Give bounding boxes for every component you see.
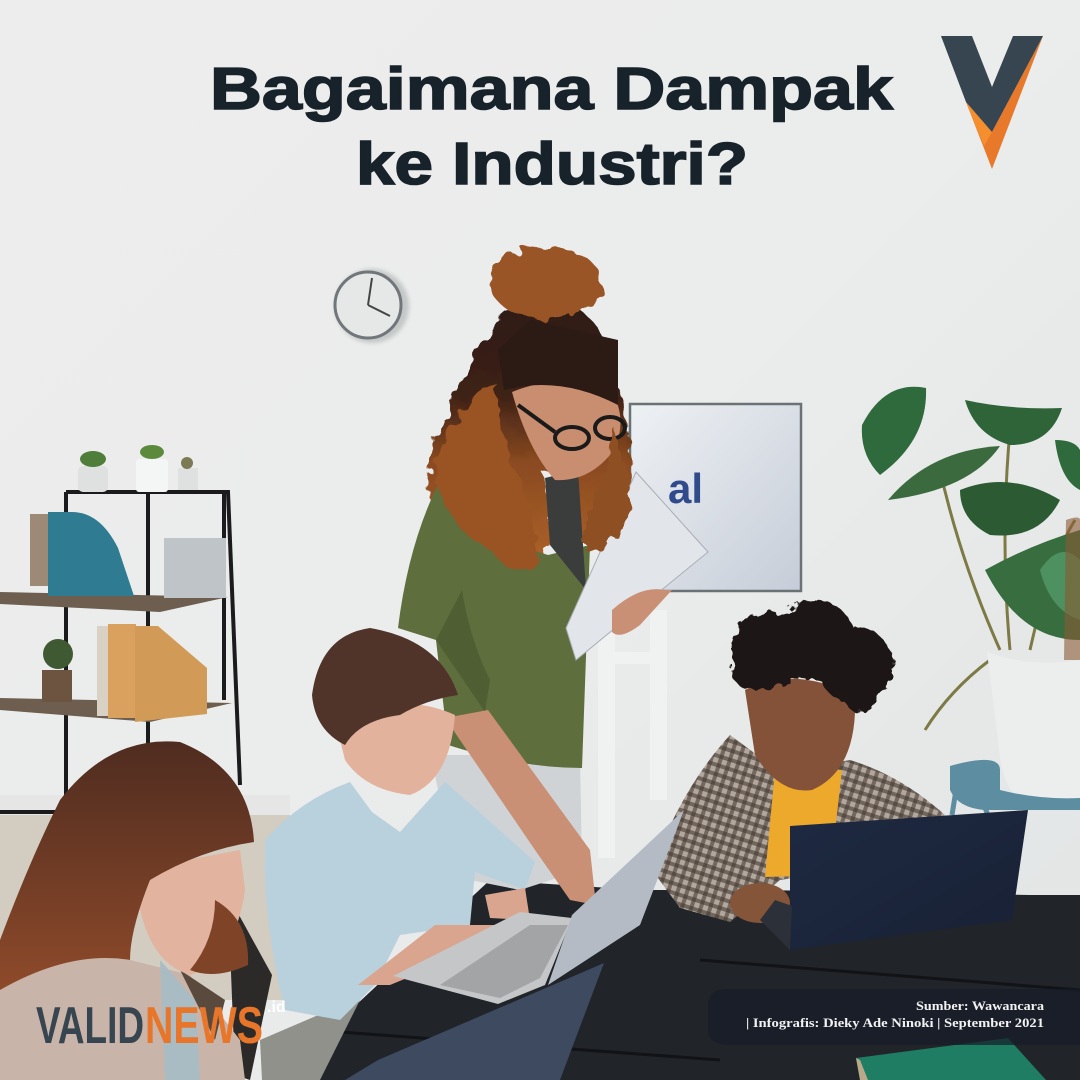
boy face [745,679,855,791]
teacher blouse [398,462,590,768]
source caption [708,989,1080,1045]
logo: Validnews: NEWS [145,997,263,1055]
source caption: Sumber: Wawancara [916,999,1045,1013]
floor [0,815,290,1000]
teacher hair back [428,298,632,572]
right laptop [760,810,1028,950]
girl hair [0,741,254,990]
table [290,880,1080,1080]
green book [856,1038,1046,1080]
boy hand [358,925,540,985]
chair [228,895,272,1080]
girl face [135,850,245,975]
title: Bagaimana Dampak [210,56,893,122]
girl blouse [0,958,245,1080]
teacher [398,247,708,905]
wall monitor [598,404,801,858]
title [210,56,893,197]
boy hand [730,883,790,923]
center boy [260,628,540,1080]
teacher face [512,382,621,480]
boy hair [312,628,458,745]
source caption: | Infografis: Dieky Ade Ninoki | September 2021 [746,1016,1044,1030]
teacher hair bun [490,247,602,319]
shelf [0,445,240,812]
teacher arm [445,710,596,905]
boy shirt [652,735,945,922]
teacher glasses [518,405,625,449]
potted plant [862,387,1080,815]
front laptop [345,963,604,1080]
teacher trousers [432,755,582,890]
center laptop [393,810,684,1004]
logo: V mark [941,36,1043,169]
title: ke Industri? [356,131,748,197]
teacher hair front curls [434,385,538,570]
wall monitor: al [668,465,703,512]
shelf items [30,514,50,586]
logo: Validnews [36,997,286,1055]
boy face [335,704,455,795]
boy shirt [265,782,535,1020]
clipboard [566,472,708,660]
logo: Validnews: VALID [36,997,144,1055]
boy trousers [260,960,380,1080]
boy hair [732,600,893,712]
logo: Validnews: .id [267,999,286,1016]
girl [0,741,272,1080]
wall clock [335,269,409,343]
right boy [652,600,945,923]
